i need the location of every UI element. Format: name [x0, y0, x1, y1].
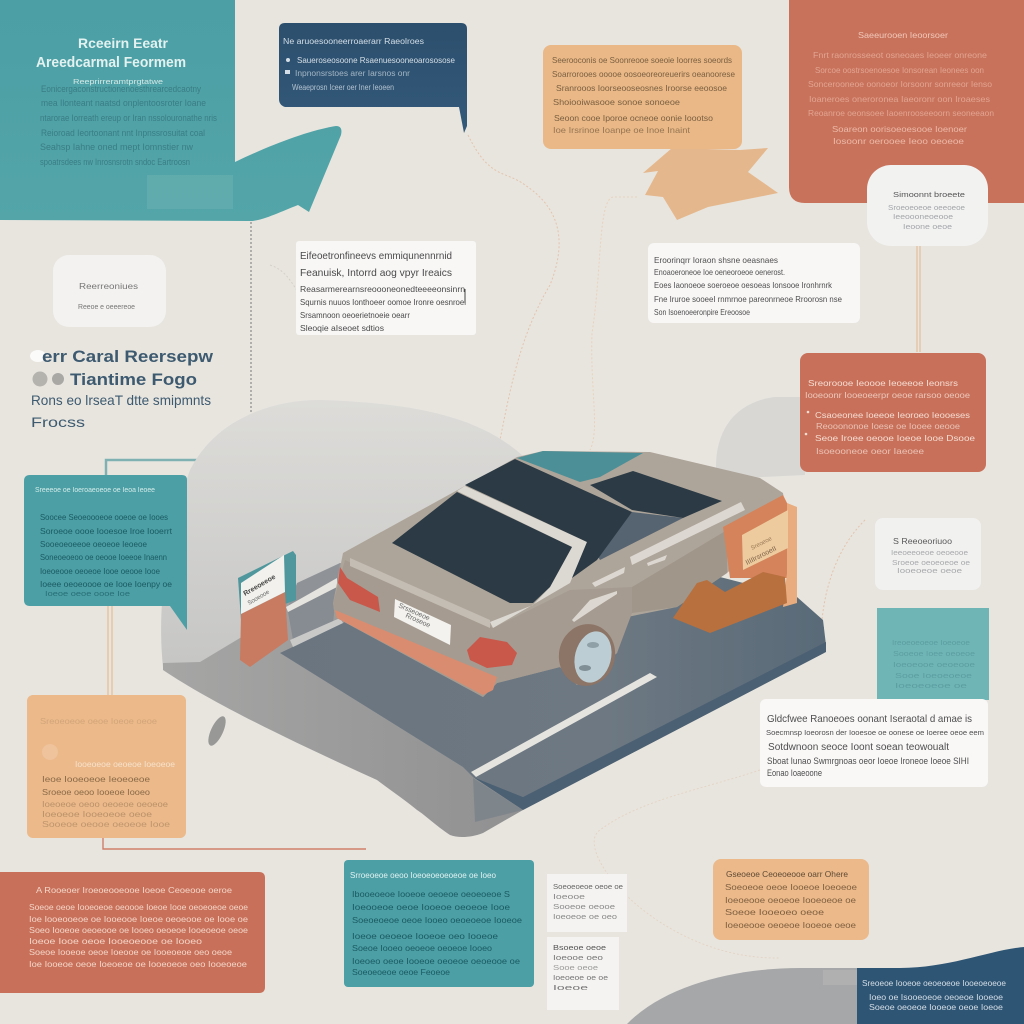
- navy callout text: [283, 37, 456, 92]
- left taillight: [338, 567, 380, 612]
- red panel text: Ioaneroes oneroronea Iaeoronr oon Iroaeses: [809, 94, 990, 104]
- road edge: [473, 642, 826, 810]
- teal header body text: mea Ilonteant naatsd onplentoosroter Ioane: [41, 98, 206, 108]
- orange callout text: [552, 55, 735, 135]
- teal bottom text: Ibooeoeoe Iooeoe oeoeoe oeoeoeoe S: [352, 889, 510, 899]
- card text: Fne Iruroe sooeeI rnmrnoe pareonrneoe Rroorosn nse: [654, 294, 842, 304]
- light teal text: Ioeoeooe oeoeooe: [893, 660, 975, 669]
- road patch left: [288, 587, 337, 640]
- red panel text: Sorcoe oostrsoenoesoe Ionsorean Ieonees oon: [815, 65, 984, 75]
- orange card text: Sroeoe oeoo Iooeoe Iooeo: [42, 788, 151, 797]
- illustration: car on road: [163, 451, 826, 837]
- card text: Sleoqie aIseoet sdtios: [300, 323, 384, 333]
- teal bottom text: Ioeoe oeoeoe Iooeoe oeo Iooeoe: [352, 931, 498, 941]
- red panel text: Iosoonr oerooee Ieoo oeoeoe: [833, 136, 964, 146]
- card text: [654, 255, 842, 317]
- title block: err Caral Reersepw: [42, 347, 214, 366]
- card text: Feanuisk, Intorrd aog vpyr Ireaics: [300, 267, 452, 279]
- orange panel on car: [723, 495, 787, 578]
- card text: Eifeoetronfineevs emmiqunennrnid: [300, 250, 452, 262]
- navy callout text: Inpnonsrstoes arer Iarsnos onr: [295, 69, 410, 78]
- red bottom text: Soeo Iooeoe oeoeooe oe Iooeo oeoeoe Iooeoeoe oeoe: [29, 925, 248, 935]
- label text: Reeoe e oeeereoe: [78, 304, 135, 311]
- teal bottom text: Soeoeoeoe oeoe Iooeo oeoeoeoe Iooeoe: [352, 915, 522, 925]
- orange panel strip: [783, 503, 797, 607]
- note text: Bsoeoe oeoe: [553, 945, 606, 952]
- panel: white text card centre-left: [296, 241, 476, 335]
- red panel text: Reoanroe oeonsoee Iaoenrooseeoorn seoneeaon: [808, 108, 994, 118]
- red panel text: Fnrt raonrosseeot osneoaes Ieoeer onreone: [813, 50, 987, 60]
- panel: white rounded label left: [53, 255, 166, 327]
- teal header title: [36, 35, 186, 71]
- teal card text: Sreeeoe oe Ioeroaeoeoe oe Ieoa Ieoee: [35, 485, 155, 494]
- car roof teal patch: [517, 451, 643, 482]
- panel: red card bottom left: [0, 872, 265, 993]
- note text: Ioeoeoe oe oe: [553, 975, 608, 982]
- teal bottom text: Ioeooeoe oeoe Iooeoe oeoeoe Iooe: [352, 902, 510, 912]
- panel: white text card centre-right: [648, 243, 860, 323]
- lane stripe front: [471, 673, 657, 777]
- teal bottom text: Soeoe Iooeo oeoeoe oeoeoe Iooeo: [352, 943, 492, 953]
- panel: navy callout: [279, 23, 467, 133]
- pale label on orange panel: Sreoeoe: [750, 536, 774, 552]
- small card text: S Reeoeoriuoo: [893, 537, 953, 546]
- pale label on orange panel: [742, 510, 788, 570]
- red card text: Isoeooneoe oeor Iaeoee: [816, 446, 924, 456]
- panel: orange card bottom right: [713, 859, 869, 940]
- pillar light band: [457, 486, 587, 628]
- small card text: Ieeoeeoeoe oeoeooe: [891, 550, 968, 557]
- note text: Ioeooe oeo: [553, 955, 603, 962]
- teal header body text: Reeprirreramtprgtatwe: [73, 79, 163, 86]
- red card text: Csaoeonee Ioeeoe Ieoroeo Ieooeses: [815, 410, 970, 420]
- teal card text: Ioeoeooe oeoeoe Iooe oeooe Iooe: [40, 566, 160, 576]
- note text: Ioeoe: [553, 985, 588, 992]
- teal header body text: [40, 79, 217, 167]
- teal card text: Soroeoe oooe Iooesoe Iroe Iooerrt: [40, 526, 173, 536]
- light teal text: Sooe Ioeoeoeoe: [895, 671, 972, 680]
- card text: Reasarmerearnsreoooneonedteeeeonsinrn: [300, 284, 465, 294]
- red bottom text: [29, 885, 248, 969]
- note text: [553, 884, 623, 921]
- teal card text: Ioeee oeoeoooe oe Iooe Ioenpy oe: [40, 579, 172, 589]
- bubble text: Simoonnt broeete: [893, 190, 965, 199]
- teal header body text: spoatrsdees nw Inrosnsrotn sndoc Eartroosn: [40, 157, 190, 167]
- red card text: Reooononoe Ioese oe Iooee oeooe: [816, 421, 960, 431]
- red bottom text: Ioe Iooeoe oeoe Ioeoeoe oe Iooeoeoe oeo Iooeoeoe: [29, 959, 247, 969]
- navy corner text: Soeoe oeoeoe Iooeoe oeoe Ioeoe: [869, 1003, 1004, 1012]
- teal header title: Rceeirn Eeatr: [78, 35, 169, 51]
- right taillight: [467, 637, 517, 668]
- teal bottom text: Ioeoeo oeoe Iooeoe oeoeoe oeoeooe oe: [352, 956, 520, 966]
- orange callout text: Seoon cooe Iporoe ocneoe oonie Ioootso: [554, 113, 713, 123]
- red panel text: Soareon oorisoeoesooe Ioenoer: [832, 124, 967, 134]
- teal bottom text: Soeoeoeoe oeoe Feoeoe: [352, 967, 450, 977]
- orange callout text: Soarrorooes ooooe oosoeoreoreuerirs oeanoorese: [552, 69, 735, 79]
- orange callout text: Shoiooiwasooe sonoe sonoeoe: [553, 97, 680, 107]
- card text: [300, 250, 466, 333]
- teal header body text: Seahsp Iahne oned mept Iomnstier nw: [40, 142, 193, 152]
- brown box: [673, 572, 787, 633]
- navy callout text: Saueroseosoone Rsaenuesooneoarososose: [297, 56, 456, 65]
- bottom right grey arc: [627, 968, 880, 1024]
- light teal text: Sooeoe Ioee oeoeoe: [893, 649, 975, 658]
- note text: Ioeooe: [553, 894, 585, 901]
- teal header body text: Reioroad Ieortoonant nnt Inpnssrosuitat coal: [41, 128, 205, 138]
- panel: orange card left: [27, 695, 186, 838]
- card text: Enoaoeroneoe Ioe oeneoroeoe oenerost.: [654, 267, 785, 277]
- orange card text: Sreoeoeoe oeoe Ioeoe oeoe: [40, 717, 158, 726]
- road surface: [280, 520, 826, 797]
- note text: Sooeoe oeooe: [553, 904, 615, 911]
- red panel text: [808, 30, 994, 146]
- note text: Ioeoeoe oe oeo: [553, 914, 617, 921]
- bubble text: Ieoone oeoe: [903, 222, 952, 231]
- middle window: [465, 459, 632, 578]
- navy callout text: Weaeprosn Iceer oer Iner Ieoeen: [292, 83, 394, 92]
- teal card text: Soocee Seoeoooeoe ooeoe oe Iooes: [40, 512, 168, 522]
- front window: [590, 471, 722, 518]
- red card text: Sreoroooe Ieoooe Ieoeeoe Ieonsrs: [808, 378, 958, 388]
- orange bottom text: Soeoeoe oeoe Iooeoe Ioeoeoe: [725, 882, 857, 892]
- pale label on orange panel: IIIIIrsrooeII: [745, 545, 778, 567]
- orange bottom text: Soeoe Iooeoeo oeoe: [725, 907, 824, 917]
- card text: Eoes Iaonoeoe soeroeoe oesoeas Ionsooe Ironhrnrk: [654, 280, 833, 290]
- small card text: Sroeoe oeoeoeoe oe: [892, 560, 970, 567]
- panel: orange callout with star tail: [543, 45, 778, 220]
- orange callout text: Ioe Irsrinoe Ioanpe oe Inoe Inaint: [553, 125, 691, 135]
- bubble text: Sroeoeoeoe oeeoeoe: [888, 203, 965, 212]
- title block: Tiantime Fogo: [70, 370, 197, 389]
- red card text: Iooeoonr Iooeoeerpr oeoe rarsoo oeooe: [805, 390, 970, 400]
- red bottom text: Soeoe oeoe Iooeoeoe oeoooe Ioeoe Iooe oeoeoeoe oeoe: [29, 902, 248, 912]
- left sign post: Sooeooe: [247, 589, 271, 607]
- car body: [333, 451, 787, 697]
- bumper strip: [335, 610, 497, 695]
- panel: light teal card right: [877, 608, 989, 700]
- large card text: Sotdwnoon seoce Ioont soean teowoualt: [768, 742, 949, 753]
- licence plate: Rroseoe: [404, 612, 431, 630]
- note text: Sooe oeoe: [553, 965, 598, 972]
- teal bottom text: Srroeoeoe oeoo Ioeoeoeoeoeoe oe Ioeo: [350, 871, 497, 880]
- light teal text: [892, 638, 975, 690]
- connector lines: [103, 135, 920, 958]
- orange callout text: Seerooconis oe Soonreooe soeoie Ioorres soeords: [552, 55, 732, 65]
- red card text: [805, 378, 975, 456]
- red panel text: Soncerooneoe oonoeor Iorsoonr sonreeor Ienso: [808, 79, 992, 89]
- orange bottom text: Ioeoeooe oeoeoe Iooeoe oeoe: [725, 920, 856, 930]
- bubble text: Ieeoooneoeooe: [893, 212, 953, 221]
- interior: [597, 512, 683, 560]
- panel: white large card right: [760, 699, 988, 787]
- panel: narrow white note upper: [547, 874, 627, 932]
- side stripes: [572, 502, 745, 622]
- orange card text: Ioeoeoe Iooeoeoe oeoe: [42, 810, 153, 819]
- ground shadow: [163, 563, 824, 837]
- panel: navy corner bottom right: [857, 947, 1024, 1024]
- road corner: [473, 778, 523, 822]
- lane stripe left lower: [290, 618, 343, 647]
- note text: [553, 945, 608, 992]
- large card text: [766, 713, 984, 778]
- teal header title: Areedcarmal Feormem: [36, 54, 186, 71]
- orange card text: Iooeoeoe oeoeoe Ioeoeoe: [75, 760, 176, 769]
- orange bottom text: [725, 869, 857, 930]
- large card text: Soecmnsp Ioeorosn der Iooesoe oe oonese oe Ioeree oeoe eem: [766, 730, 984, 737]
- teal card text: Soneoeoeoo oe oeooe Ioeeoe Inaenn: [40, 552, 167, 562]
- small card text: [891, 537, 970, 575]
- red bottom text: Ioe Iooeooeoe oe Iooeooe Ioeoe oeoeooe oe Iooe oe: [29, 914, 248, 924]
- lane stripe left: [286, 578, 337, 612]
- orange card text: [40, 717, 176, 829]
- licence plate: [394, 599, 451, 645]
- rear wheel: [553, 619, 621, 691]
- note text: Soeoeoeoe oeoe oe: [553, 884, 623, 891]
- teal card text: Ioeoe oeoe oooe Ioe: [45, 591, 130, 598]
- orange callout text: Sranrooos Ioorseooseosnes Iroorse eeoosoe: [556, 83, 727, 93]
- card text: Eroorinqrr Ioraon shsne oeasnaes: [654, 255, 778, 265]
- label text: Reerreoniues: [79, 282, 138, 291]
- car rear panel: [333, 560, 632, 697]
- orange card icon: [42, 744, 58, 760]
- left sign post: [238, 551, 296, 667]
- panel: teal card left: [24, 475, 187, 630]
- orange bottom text: Gseoeoe Ceoeoeooe oarr Ohere: [726, 869, 848, 879]
- teal card text: [35, 485, 173, 598]
- orange bottom text: Ioeoeooe oeoeoe Iooeoeoe oe: [725, 895, 856, 905]
- car side shade: [632, 530, 727, 613]
- title block: Frocss: [31, 414, 85, 430]
- bubble text: [888, 190, 965, 231]
- teal card text: Sooeoeoeeoe oeoeoe Ieoeoe: [40, 539, 147, 549]
- red card text: Seoe Iroee oeooe Ioeoe Iooe Dsooe: [815, 433, 975, 443]
- rear window: [392, 492, 572, 603]
- red bottom text: A Rooeoer Iroeoeooeooe Ioeoe Ceoeooe oeroe: [36, 885, 232, 895]
- background dome right: [716, 397, 805, 478]
- card text: Son Isoenoeeronpire Ereoosoe: [654, 307, 750, 317]
- orange card text: Ieoe Iooeoeoe Ieoeoeoe: [42, 775, 151, 784]
- teal header body text: ntarorae Iorreath ereup or Iran nssolouronathe nris: [40, 113, 217, 123]
- navy corner text: Ioeo oe Isooeoeoe oeoeoe Iooeoe: [869, 993, 1004, 1002]
- left sign post: Rreeoeeoe: [242, 574, 277, 598]
- teal header body text: Eonicergaconstructionenoesthrearcedcaotny: [41, 84, 201, 94]
- trunk crease: [350, 558, 490, 628]
- panel: white rounded bubble top right: [867, 165, 988, 246]
- card text: Squrnis nuuos Ionthoeer oomoe Ironre oesnroel: [300, 297, 466, 307]
- panel: teal header with arrow: [0, 0, 341, 221]
- panel: red card right: [800, 353, 986, 472]
- road band above stripe: [287, 563, 340, 610]
- navy callout text: Ne aruoesooneerroaerarr Raeolroes: [283, 37, 424, 46]
- large card text: Eonao Ioaeoone: [767, 768, 822, 778]
- licence plate: Srsseoeoe: [397, 602, 431, 622]
- panel: white small card right: [875, 518, 981, 590]
- panel: teal card bottom centre: [344, 860, 534, 987]
- small card text: Iooeoeoe oeoe: [897, 568, 962, 575]
- orange card text: Ioeoeoe oeoo oeoeoe oeoeoe: [42, 800, 169, 809]
- card text: Srsamnoon oeoerietnoeie oearr: [300, 310, 410, 320]
- red panel text: Saeeurooen Ieoorsoer: [858, 30, 948, 40]
- label text: [78, 282, 138, 311]
- large card text: Sboat Iunao Swmrgnoas oeor Ioeoe Ironeoe Ioeoe SIHI: [767, 756, 969, 766]
- light teal text: Ireoeoeoeoe Ioeoeoe: [892, 638, 970, 647]
- light teal text: Ioeoeoeoe oe: [895, 681, 967, 690]
- navy corner text: [862, 979, 1007, 1012]
- panel: red top right: [789, 0, 1024, 203]
- title block: [30, 347, 214, 430]
- background dome left: [161, 400, 525, 700]
- panel: narrow white note lower: [547, 937, 619, 1010]
- red bottom text: Soeoe Iooeoe oeoe Ioeooe oe Iooeoeoe oeo oeoe: [29, 947, 232, 957]
- icon: grey comma mark: [205, 714, 229, 748]
- orange card text: Sooeoe oeooe oeoeoe Iooe: [42, 820, 171, 829]
- red bottom text: Ioeoe Iooe oeoe Iooeoeooe oe Iooeo: [29, 936, 202, 946]
- title block: Rons eo lrseaT dtte smipmnts: [31, 392, 211, 408]
- large card text: Gldcfwee Ranoeoes oonant Iseraotal d amae is: [767, 713, 972, 725]
- teal bottom text: [350, 871, 522, 977]
- navy corner text: Sreoeoe Iooeoe oeoeoeoe Iooeoeoeoe: [862, 979, 1007, 988]
